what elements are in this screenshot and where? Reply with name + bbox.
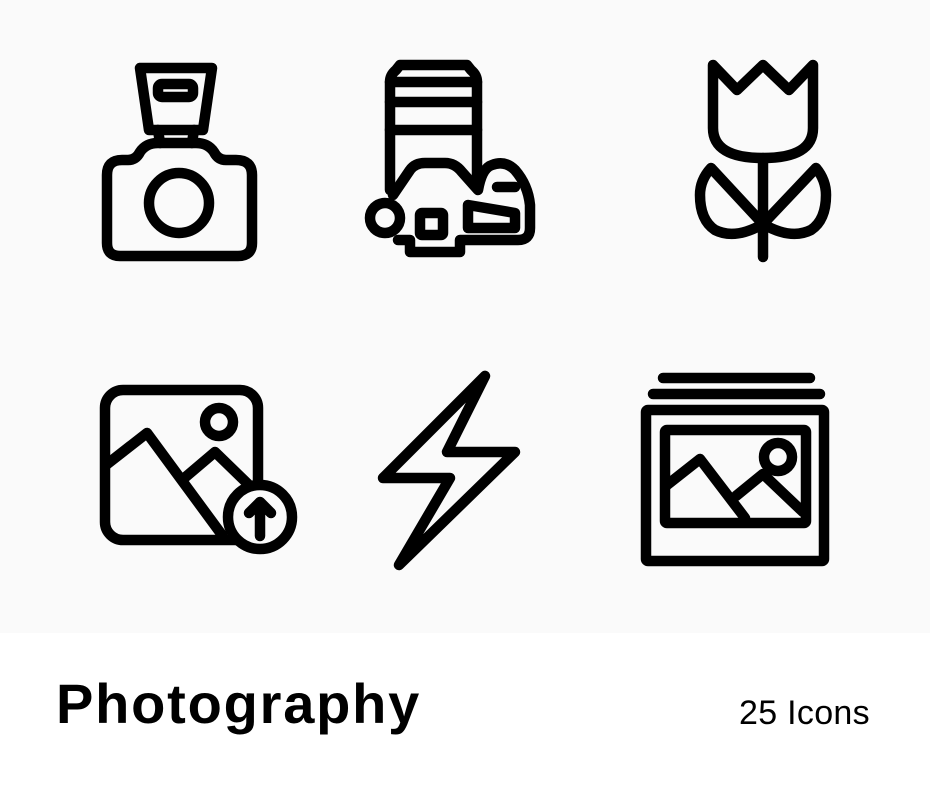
icon: lightning flash [383,376,515,565]
icon: photo album stack [646,378,824,561]
icon: image upload [105,390,292,549]
icon: DSLR camera top view [370,65,530,252]
title: Photography [56,672,421,735]
icon: tulip macro [700,65,826,257]
icon count: 25 Icons [739,694,870,732]
icon: camera with flash [107,68,252,256]
